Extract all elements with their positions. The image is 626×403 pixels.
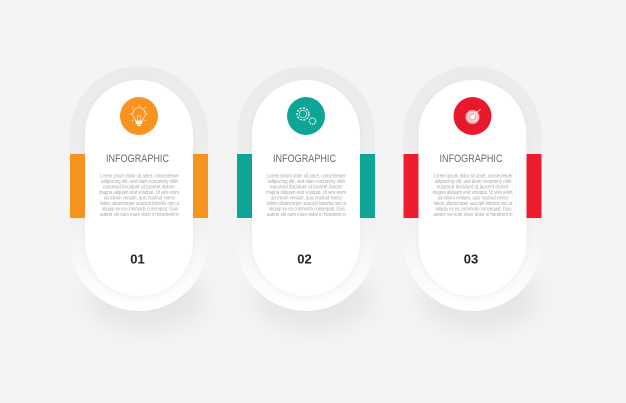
text block: card 1: Lorem ipsum dolor sit amet, consectetuer (100, 174, 179, 180)
panel: card 2 (237, 66, 375, 330)
drop shadow: card 1 (86, 266, 206, 330)
heading: card 3: INFOGRAPHIC (440, 153, 503, 165)
text block: card 3: Lorem ipsum dolor sit amet, consectetuer (434, 174, 513, 180)
right bar: card 1 (193, 154, 208, 218)
panel: card 3 (404, 66, 542, 330)
number: card 2: 02 (297, 252, 312, 266)
text block: card 1: magna aliquam erat volutpat. Ut wisi enim (99, 190, 179, 196)
text block: card 2: adipiscing elit, sed diam nonummy nibh (268, 179, 345, 185)
text block: card 1: aliquip ex ea commodo consequat. Duis (102, 206, 178, 212)
heading: card 2: INFOGRAPHIC (273, 153, 336, 165)
text block: card 2: autem vel eum iriure dolor in hendrerit in (267, 212, 346, 218)
text block: card 1: autem vel eum iriure dolor in hendrerit in (100, 212, 179, 218)
text block: card 1: adipiscing elit, sed diam nonummy nibh (101, 179, 178, 185)
text block: card 3: adipiscing elit, sed diam nonummy nibh (434, 179, 512, 185)
text block: card 3: euismod tincidunt ut laoreet dolore (436, 184, 509, 190)
text block: card 1: ad minim veniam, quis nostrud exerci (104, 196, 175, 202)
panel: card 1 (70, 66, 208, 330)
text block: card 3: magna aliquam erat volutpat. Ut wisi enim (432, 190, 512, 196)
inner shadow: card 3 (418, 82, 526, 298)
text block: card 1: tation ullamcorper suscipit lobortis nisl ut (100, 201, 180, 207)
number: card 3: 03 (464, 252, 478, 266)
text block: card 2: tation ullamcorper suscipit lobortis nisl ut (267, 201, 347, 207)
inner pill: card 1 (85, 80, 193, 296)
icon: gears (287, 97, 325, 135)
drop shadow: card 3 (420, 266, 540, 330)
text block: card 2: Lorem ipsum dolor sit amet, consectetuer (267, 174, 346, 180)
outer pill: card 2 (237, 66, 375, 311)
inner shadow: card 1 (85, 82, 193, 298)
text block: card 2: magna aliquam erat volutpat. Ut wisi enim (266, 190, 346, 196)
right bar: card 3 (526, 154, 542, 218)
inner pill: card 3 (418, 80, 526, 296)
icon: light bulb (120, 97, 158, 135)
outer pill: card 3 (404, 66, 542, 311)
number: card 1: 01 (130, 252, 145, 266)
text block: card 1 (99, 174, 180, 218)
text block: card 2: euismod tincidunt ut laoreet dolore (270, 184, 342, 190)
drop shadow: card 2 (253, 266, 373, 330)
text block: card 3: ad minim veniam, quis nostrud exerci (438, 196, 508, 202)
text block: card 3: aliquip ex ea commodo consequat. Duis (436, 206, 512, 212)
icon: target (454, 97, 492, 135)
left bar: card 2 (237, 154, 252, 218)
left bar: card 1 (70, 154, 85, 218)
text block: card 2: aliquip ex ea commodo consequat. Duis (269, 206, 345, 212)
left bar: card 3 (404, 154, 418, 218)
text block: card 1: euismod tincidunt ut laoreet dolore (103, 184, 175, 190)
heading: card 1: INFOGRAPHIC (106, 153, 169, 165)
text block: card 3: autem vel eum iriure dolor in hendrerit in (434, 212, 513, 218)
text block: card 2 (266, 174, 347, 218)
text block: card 3: tation ullamcorper suscipit lobortis nisl ut (434, 201, 513, 207)
text block: card 2: ad minim veniam, quis nostrud exerci (271, 196, 342, 202)
right bar: card 2 (360, 154, 375, 218)
inner pill: card 2 (252, 80, 360, 296)
text block: card 3 (432, 174, 513, 218)
outer pill: card 1 (70, 66, 208, 311)
inner shadow: card 2 (252, 82, 360, 298)
